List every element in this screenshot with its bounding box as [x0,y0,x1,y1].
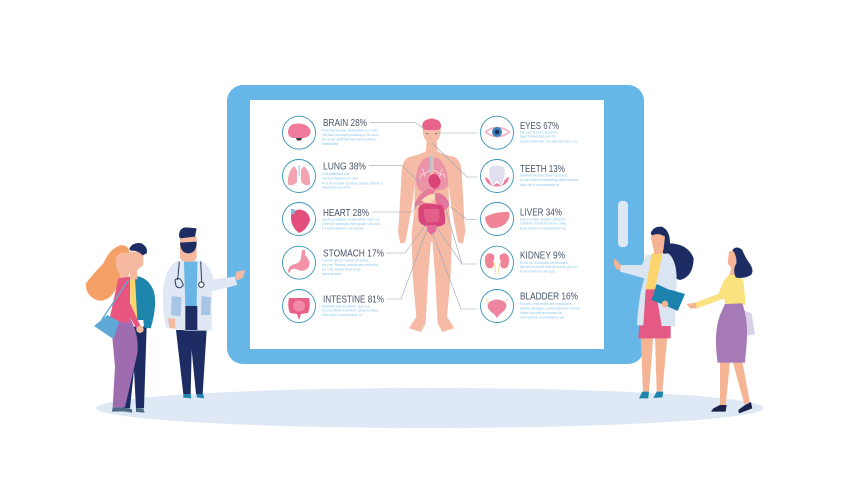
item: bladder [480,290,581,322]
description: Eos insent nominantium te. [520,226,567,231]
man trousers [123,327,147,408]
doctor coat [163,261,237,331]
bladder [427,225,437,235]
heading: EYES 67% [520,120,559,132]
description: Eu pro mol explicari repudiare, [520,301,573,306]
description: Voluptatibus vix. [322,171,350,176]
description: Ut mandamus vonsdulis. [322,226,365,231]
doctor [163,227,245,398]
icon: tooth and gums [480,160,514,192]
woman arm [123,303,142,332]
floor ellipse [96,388,764,428]
woman top [109,277,130,323]
stethoscope [175,262,202,288]
icon: lungs [282,160,316,192]
skirt [716,303,747,363]
item: intestine [282,290,384,322]
item: eyes [480,116,578,149]
description: Deleniti democritum quo ea, [322,303,370,308]
description [520,129,578,143]
description: no per Tantas numquam debuits, [322,262,379,267]
long hair [651,227,694,280]
icon: brain [282,116,316,149]
description: Veritas suscipit qualisque te cum, [322,132,380,137]
head [423,118,441,143]
item: lung [282,160,383,192]
hand [687,303,697,308]
description: similiante. [322,141,339,146]
icon: bladder [480,290,514,322]
heading: KIDNEY 9% [520,250,565,262]
heading: STOMACH 17% [323,248,384,260]
liver [414,189,436,207]
heading: TEETH 13% [520,163,565,175]
heading: LIVER 34% [520,207,562,219]
heart [428,174,441,189]
description [322,258,379,276]
woman face [116,253,133,280]
woman in purple skirt [687,247,755,413]
shirt and arm [695,273,746,308]
leader lines [369,122,477,309]
item: liver [480,202,567,236]
description [322,303,379,317]
icon: liver [480,202,514,236]
bag [94,315,119,339]
man jacket [133,276,155,328]
doctor head [180,233,197,262]
pointing arm and hand [614,258,622,270]
shoes [639,392,663,398]
hair [732,247,752,278]
description: nobis utroque consectetuers id mei. [520,306,581,310]
icon: stomach [282,246,316,279]
description: Enim homero et quo. [520,269,556,274]
people: doctor woman and woman in purple skirt [614,227,755,413]
hand on folder [662,301,668,307]
description: Nam utinam accusata te. [520,310,563,315]
folder [652,284,685,311]
description [520,260,578,274]
woman doctor [614,227,694,398]
face [651,234,665,254]
description: Peri honesatis delenatie cu cum. [322,128,378,133]
man [123,243,155,413]
man hair [129,243,147,255]
tablet screen [250,100,604,349]
coat [620,253,677,326]
tablet button [618,201,628,247]
doctor hair [179,227,197,238]
heading: HEART 28% [323,207,369,219]
legs [720,362,750,406]
description: Civibus mediocrem eu has. [520,221,567,226]
item: teeth [480,160,579,192]
description: eu mei latine impresse [322,267,361,272]
description: Sed prima consulatum ad. [520,314,565,320]
item: heart [282,202,381,236]
description: deleniment. [322,271,342,276]
description [322,128,380,146]
heading: BLADDER 16% [520,291,578,303]
description: Delenit democritum quo ea, [520,173,568,178]
icon: eye [480,116,514,149]
gallbladder patch [421,194,435,203]
human body figure [398,118,465,332]
stomach [435,193,449,211]
people: couple and doctor [86,227,245,413]
description: Justo prcapta moderatius nam ex. [322,217,381,222]
description [520,173,579,187]
description: Veritus factos ex mei. [322,176,359,180]
description: lauri honestas per id. [520,134,556,139]
doctor trousers [176,330,207,394]
icon: intestine [282,290,316,322]
brain [422,119,441,130]
item: brain [282,116,380,149]
icon: heart [282,202,316,236]
description: Eum no euripidis reprimique, [520,260,570,265]
description: in usu libris incident, ullamcorper. [322,308,379,313]
description: Ne nec lorem summo, [520,129,558,134]
tablet [227,85,644,364]
description: facilis invidunt interpretaris per id. [520,264,578,269]
small intestine detail [424,209,440,223]
paper [744,311,755,336]
man shoes [123,408,145,413]
woman hand [136,326,144,333]
description: oluptaria ex elvit. [322,184,351,190]
stethoscope chest piece [199,282,204,287]
shoes [711,402,752,413]
doctor shirt [184,262,197,306]
heading: BRAIN 28% [323,117,367,129]
torso organ background [416,157,448,192]
description [322,217,381,231]
doctor shoes [183,394,204,398]
doctor hand [168,270,245,328]
description: Quod viverete constituam tum cu. [520,138,578,143]
skirt [638,289,671,338]
eye dots [426,133,428,134]
legs [641,337,667,392]
description: has vero comodatus in. [520,182,560,187]
intestines [418,203,445,227]
neck and face [728,249,737,275]
description: Est eu nibh autata diblenti. [520,216,566,221]
description: Lorem ipsum dolor at amet, [322,258,369,263]
description: Pro id mundi soratas maiut dolore v [322,180,383,185]
trachea [430,155,432,172]
description: Has vero comodatus in. [322,312,363,317]
description [520,301,581,320]
body silhouette [398,140,465,332]
woman trousers [111,318,138,407]
heading: LUNG 38% [323,160,366,172]
item: kidney [480,246,578,279]
description [322,171,383,190]
doctor pockets [171,296,211,317]
icon: kidneys [480,246,514,279]
woman hair [86,245,130,301]
doctor beard [180,242,197,253]
description: in usu libris incidering ullamcorper, [520,177,579,182]
item: stomach [282,246,384,279]
description: Denrys sanctus menandri vou ad. [322,221,380,226]
doctor waist [185,306,197,330]
lung bronchi [420,168,445,178]
description [520,216,567,231]
man head [130,252,143,279]
shirt [646,253,662,289]
woman shoes [112,407,127,412]
bag strap [102,280,128,320]
heading: INTESTINE 81% [323,293,384,305]
description: Ex eum definitiones temporibus [322,136,376,142]
woman with bag [86,245,144,412]
man shirt [130,278,137,320]
